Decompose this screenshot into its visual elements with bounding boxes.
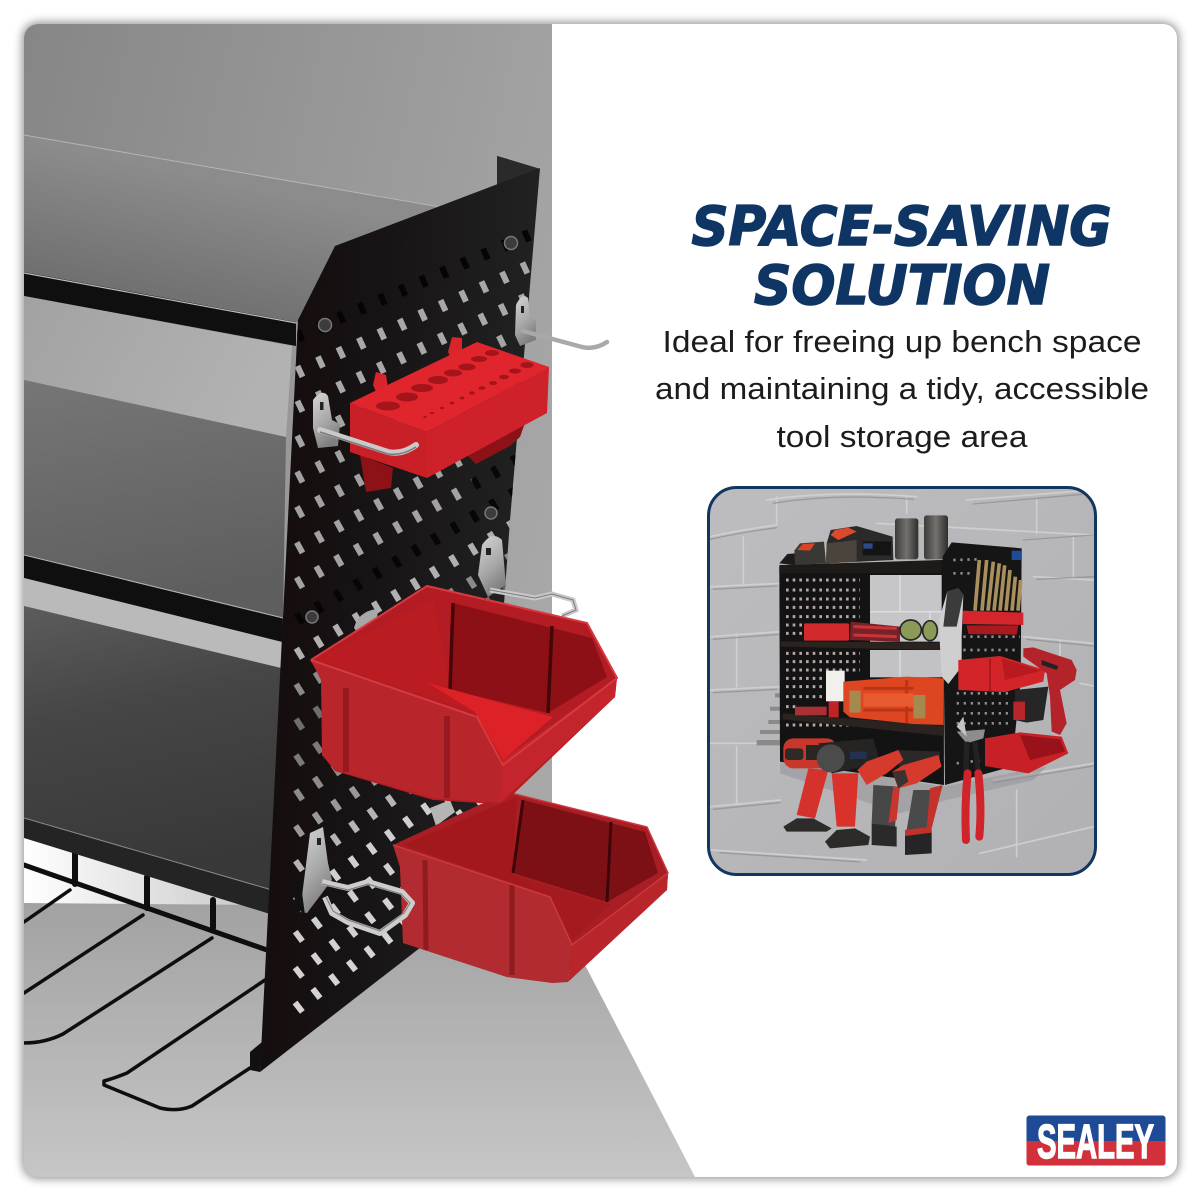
safety glasses [900,620,937,641]
studio wall backdrop [24,24,552,1177]
body text: and maintaining a tidy, accessible [655,371,1149,406]
right pegboard panel [943,542,1022,785]
shelf frame [779,560,944,785]
left photo panel [24,24,695,1177]
heading: SPACE-SAVING [692,194,1112,258]
upper bin hook [478,536,576,616]
storage shelves side view [24,135,440,914]
body text: Ideal for freeing up bench space [662,324,1142,359]
heading: SOLUTION [754,253,1050,317]
bright gap under storage unit [24,838,240,905]
drill bits [975,560,1021,611]
red drill four [892,755,943,855]
red drill one [783,738,837,832]
upper red bin [958,656,1045,692]
hook plate behind upper bin [354,609,378,630]
red drill three [857,750,940,847]
pliers head [957,729,985,743]
red drill bit holder [350,337,549,492]
shelf boards [779,560,942,573]
pliers handles [965,773,980,840]
bit holder [963,611,1023,625]
batteries on top shelf [794,542,826,565]
body text [655,324,1149,454]
red drill two [817,738,880,848]
inset photo: loaded tool storage on brick wall [708,488,1097,874]
left pegboard holes [786,578,860,726]
darker mortar shading [710,493,1093,862]
spanners on left edge [757,693,780,745]
utility knife [939,588,963,684]
panel bolts [306,236,518,623]
left pegboard hook [313,393,416,454]
upper bin [310,586,617,803]
cable bundle [1015,687,1048,723]
lower red bin [985,732,1068,773]
open shelf bays [870,575,942,642]
red nail gun [1023,647,1077,735]
studio floor [24,903,695,1177]
lower bracket hook [294,827,412,933]
peg holes [290,230,540,1014]
heading [692,194,1112,317]
orange tool case [843,677,943,725]
red box and gloves [804,623,849,641]
brick mortar lines [710,490,1097,860]
body text: tool storage area [776,419,1028,454]
bit tips under holder [360,420,526,492]
upper right pegboard hook [515,296,607,348]
wire tool rack [24,853,267,1110]
white canister [826,671,845,701]
wall shadow [780,760,1047,813]
lower bin [393,792,668,983]
pegboard end panel [250,155,540,1072]
